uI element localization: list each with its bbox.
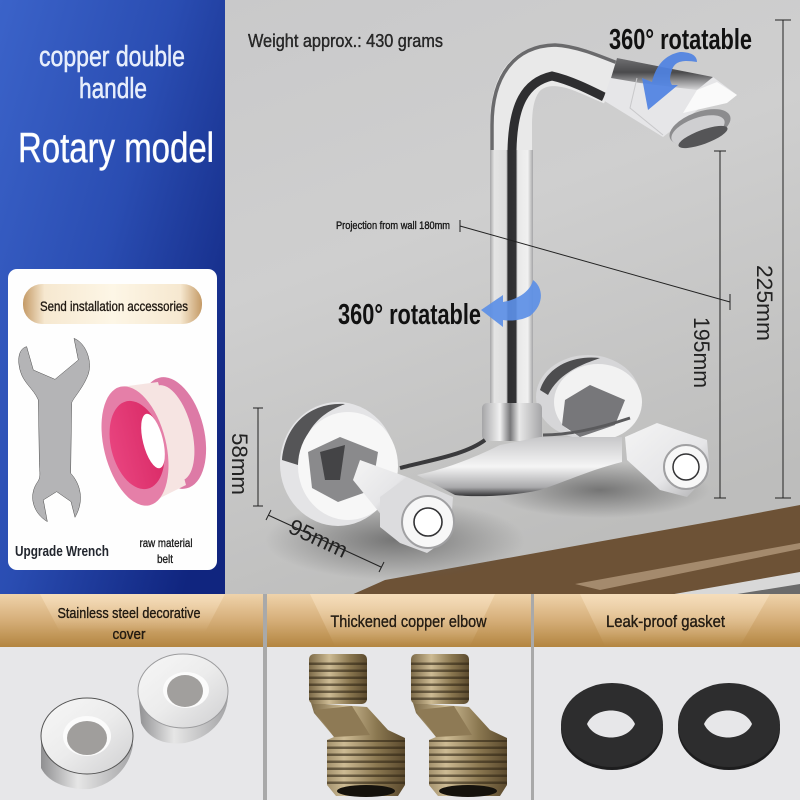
label: weight: Weight approx.: 430 grams (248, 31, 443, 51)
heading band: cover (112, 626, 146, 643)
icon: gasket left (561, 683, 663, 770)
accessories heading pill (23, 284, 202, 324)
countertop and sink (340, 505, 800, 600)
panel dividers backing (0, 594, 800, 800)
dimension: 95mm (266, 510, 384, 572)
pipe base collar (482, 403, 542, 441)
left blue panel (0, 0, 225, 594)
heading band: Stainless steel decorative (58, 605, 200, 622)
heading band (534, 594, 800, 647)
heading band: Thickened copper elbow (330, 612, 487, 631)
label: upgrade wrench: Upgrade Wrench (15, 543, 109, 560)
panel: thickened copper elbow (267, 594, 531, 800)
spout tube (492, 45, 620, 190)
dimension: projection from wall (336, 220, 730, 310)
left handle (353, 460, 454, 553)
panel title: copper double handle: copper double (39, 41, 185, 73)
heading band (267, 594, 531, 647)
icon: cover front (41, 698, 133, 789)
faucet body (400, 418, 630, 496)
label: raw material belt (140, 536, 192, 566)
dimension: projection from wall: Projection from wall 180mm (336, 220, 450, 232)
arrow: pipe rotation (481, 280, 541, 327)
panel title: copper double handle (39, 41, 185, 105)
shadows (265, 500, 525, 580)
heading band (0, 594, 263, 647)
faucet (265, 45, 737, 580)
dimension: 225mm: 225mm (752, 265, 777, 341)
right wall cover (536, 355, 642, 440)
label: top 360 rotatable: 360° rotatable (609, 24, 752, 56)
icon: elbow right (411, 654, 507, 797)
left wall cover (280, 402, 398, 526)
vertical pipe (490, 150, 533, 410)
right handle (625, 423, 710, 497)
dimension: 195mm (689, 151, 726, 498)
arrow: top rotation (642, 52, 697, 110)
label: raw material belt: raw material (140, 536, 192, 550)
panel: leak-proof gasket (534, 594, 800, 800)
icon: elbow left (309, 654, 405, 797)
dimension: 195mm: 195mm (689, 317, 714, 388)
wall background (225, 0, 800, 600)
dimension: 58mm (227, 408, 263, 506)
dimension: 58mm: 58mm (227, 433, 252, 495)
icon: cover back (138, 654, 228, 744)
panel title: rotary model: Rotary model (18, 124, 214, 171)
panel: installation accessories (8, 269, 217, 570)
icon: raw material belt (90, 370, 217, 513)
panel title: copper double handle: handle (79, 73, 147, 105)
spout collar and head (603, 58, 737, 152)
icon: gasket right (678, 683, 780, 770)
panel: stainless steel decorative cover (0, 594, 263, 800)
heading band: Leak-proof gasket (606, 612, 725, 631)
label: raw material belt: belt (157, 552, 174, 566)
accessories heading pill: Send installation accessories (40, 298, 188, 314)
dimension: 225mm (752, 20, 791, 498)
icon: wrench (19, 338, 90, 522)
label: pipe 360 rotatable: 360° rotatable (338, 299, 481, 331)
dimension: 95mm: 95mm (285, 514, 352, 563)
